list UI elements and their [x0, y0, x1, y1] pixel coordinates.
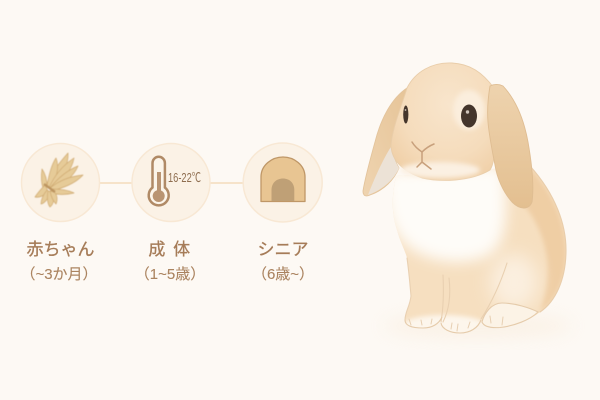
label: senior: シニア	[258, 240, 308, 259]
stage: adult	[132, 144, 210, 283]
left eye	[403, 106, 408, 124]
right eye	[461, 104, 477, 128]
head	[391, 63, 496, 180]
icon: thermometer	[149, 157, 169, 205]
icon: dome hut	[261, 157, 305, 202]
illustration: rabbit	[363, 63, 573, 338]
rabbit body	[393, 166, 566, 333]
right ear	[488, 84, 533, 208]
temperature label: 16-22℃	[168, 170, 201, 185]
paw highlights	[406, 313, 482, 332]
back shading	[526, 170, 566, 310]
front foot left	[405, 317, 442, 328]
body outline	[530, 166, 566, 312]
chin highlight	[400, 162, 480, 178]
icon circle: senior	[243, 143, 322, 222]
toe marks	[409, 316, 503, 331]
stage: baby	[20, 144, 100, 283]
body shading	[384, 165, 566, 337]
connector lines between stages	[100, 182, 243, 184]
age: senior: （6歳~）	[252, 266, 314, 283]
hind foot	[482, 303, 538, 328]
leg outlines	[405, 258, 507, 322]
age: baby: （~3か月）	[20, 266, 98, 283]
stage: senior	[243, 143, 322, 283]
eye patch	[453, 90, 485, 130]
left ear inner	[368, 145, 399, 195]
ground shadow	[383, 314, 573, 338]
left ear	[363, 88, 407, 196]
icon circle: adult	[132, 144, 210, 222]
hay tie	[44, 184, 55, 192]
label: baby: 赤ちゃん	[26, 240, 94, 259]
front foot right	[441, 320, 481, 333]
label: adult: 成 体	[148, 240, 192, 259]
age: adult: （1~5歳）	[135, 266, 205, 283]
icon: hay bundle	[35, 153, 83, 207]
nose and mouth	[412, 142, 434, 169]
white chest	[384, 165, 506, 262]
haunch highlight	[490, 254, 538, 310]
icon circle: baby	[22, 144, 100, 222]
